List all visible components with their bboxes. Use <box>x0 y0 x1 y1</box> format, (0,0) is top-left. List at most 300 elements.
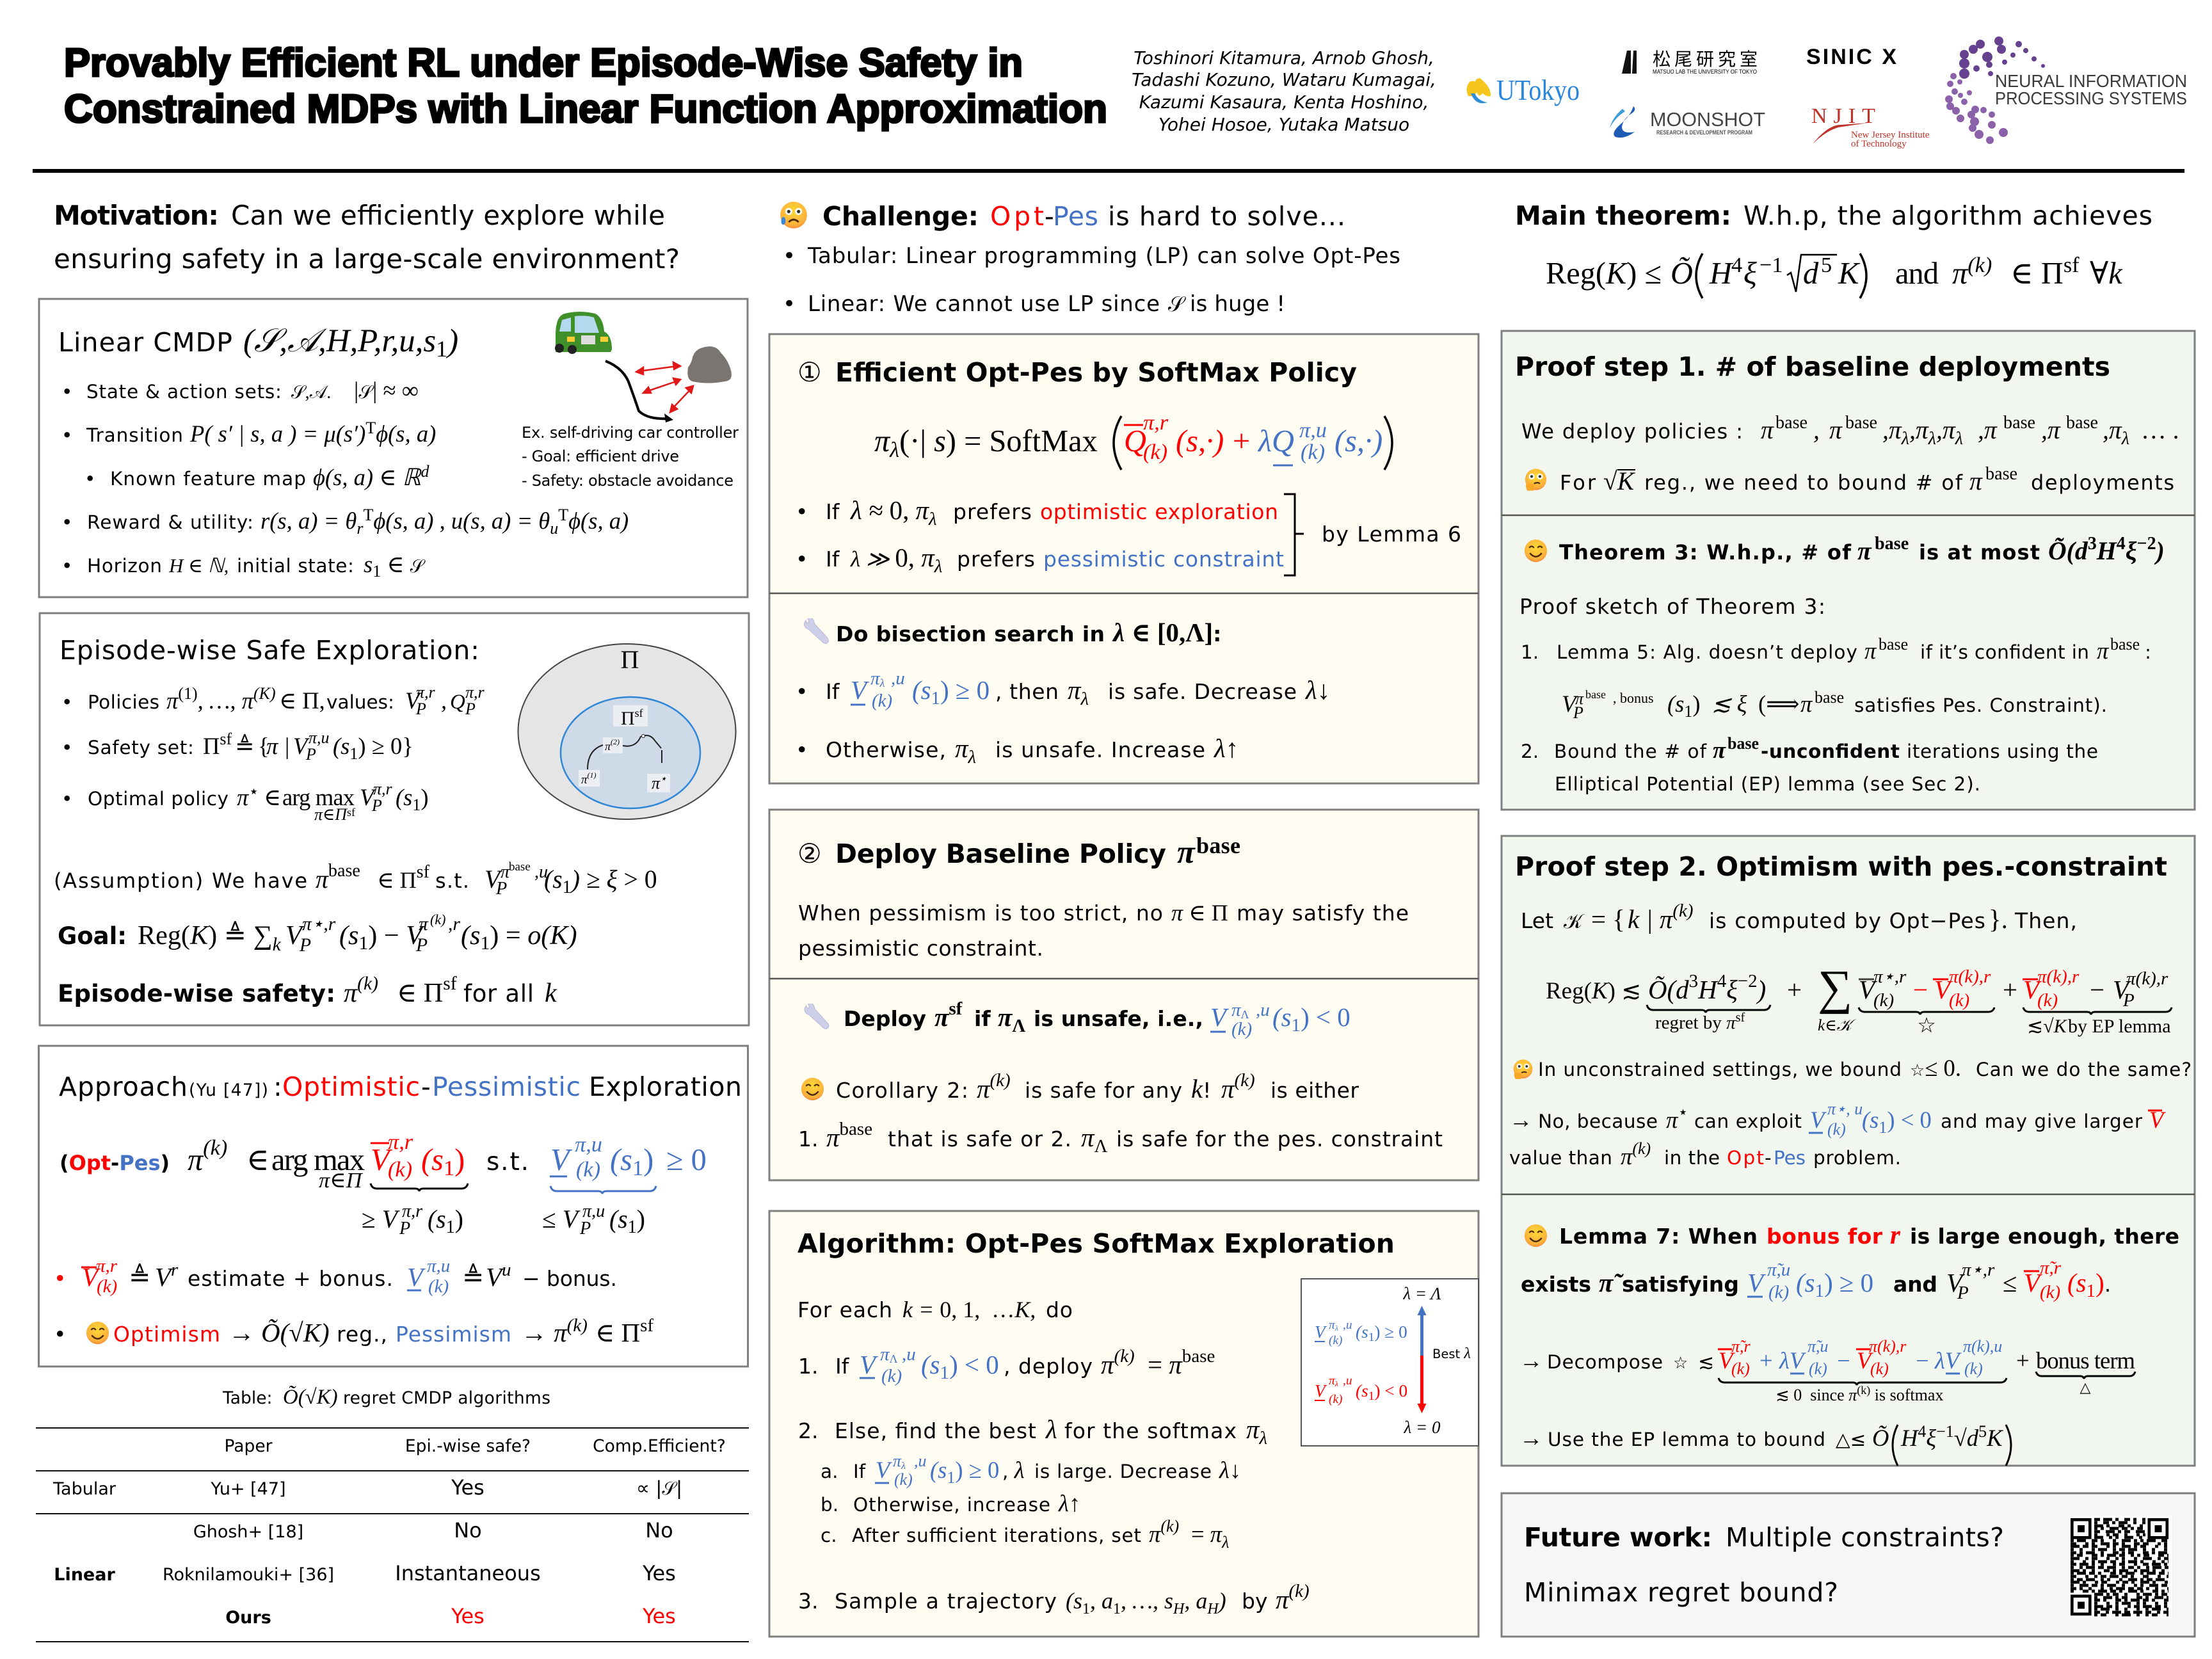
exploitation note: π <box>1621 1143 1633 1169</box>
list: definitions: ∈ Π, <box>279 687 325 714</box>
heading: approach: : <box>273 1071 282 1102</box>
algorithm steps: For each <box>797 1297 892 1322</box>
panel: episode-wise safe exploration <box>40 613 749 1025</box>
bisection bullets: λ↓ <box>1305 676 1330 705</box>
logo: NJIT: New Jersey Institute <box>1851 130 1930 140</box>
goal: Reg( <box>138 920 190 950</box>
theorem 3: is at most <box>1919 540 2040 565</box>
goal: K) ≜ ∑ <box>190 920 273 950</box>
definition of K: = { <box>1591 905 1625 934</box>
algorithm steps: ,u <box>902 1344 916 1365</box>
regret decomposition: π(k),r <box>1949 966 1991 987</box>
definition of K: 𝒦 <box>1564 910 1585 933</box>
thinking note: base <box>1985 464 2017 484</box>
bullet: optimism and pessimism: ∈ Π <box>595 1318 640 1347</box>
decomposition: Decompose <box>1547 1351 1663 1373</box>
proof sketch: base <box>1727 734 1759 753</box>
table: regret CMDP algorithms: Yu+ [47] <box>210 1479 286 1499</box>
bounds under formula: ≤ <box>542 1205 563 1233</box>
logo: Moonshot <box>1610 106 1765 138</box>
regret decomposition: H <box>1697 975 1719 1004</box>
assumption: 1 <box>563 878 572 897</box>
bullet: estimates: V <box>486 1263 504 1292</box>
list: definitions: Safety set: <box>88 737 194 758</box>
bounds under formula: ) <box>637 1205 645 1233</box>
bisection bullets: If <box>826 679 840 704</box>
assumption: sf <box>417 862 430 882</box>
proof sketch: ) <box>1692 691 1701 717</box>
panel: linear CMDP <box>39 299 748 597</box>
exploitation note <box>1509 1100 2166 1169</box>
goal: 1 <box>480 933 490 954</box>
diagram: policy sets: Π <box>621 645 639 674</box>
bullet: optimism and pessimism: • <box>54 1322 66 1347</box>
list: definitions: • <box>61 691 72 713</box>
table: regret CMDP algorithms: Roknilamouki+ [36] <box>163 1565 334 1585</box>
proof sketch: base <box>1815 688 1844 707</box>
list: CMDP definitions: r <box>357 519 364 538</box>
inset: best lambda: V <box>1315 1322 1327 1342</box>
formula: softmax policy: λQ <box>1257 424 1294 458</box>
list: definitions: P <box>371 796 382 815</box>
list: CMDP definitions: P( s′ | s, a ) = μ(s′) <box>189 421 365 447</box>
lemma 7: is large enough, there <box>1910 1224 2179 1249</box>
deployed policies: base <box>1845 413 1877 433</box>
list: CMDP definitions: 𝒮| ≈ ∞ <box>358 377 419 403</box>
algorithm steps: λ <box>1045 1415 1057 1444</box>
logo: Moonshot: RESEARCH & DEVELOPMENT PROGRAM <box>1656 129 1752 136</box>
algorithm steps: 2. <box>798 1418 818 1443</box>
formula: Opt-Pes: (k) <box>576 1157 600 1182</box>
text: pessimism: ∈ Π <box>1189 900 1228 926</box>
proof sketch <box>1519 594 2151 795</box>
regret decomposition: − <box>1913 975 1928 1004</box>
heading: motivation: Motivation: <box>54 200 219 231</box>
deploy condition: Λ <box>1241 1008 1249 1021</box>
corollary: π <box>826 1123 840 1152</box>
algorithm steps: = <box>1148 1350 1169 1379</box>
table: regret CMDP algorithms: No <box>645 1518 673 1543</box>
algorithm steps: ,u <box>914 1452 926 1470</box>
decomposition: π̃,r <box>1731 1337 1751 1356</box>
logo: UTokyo <box>1466 74 1580 106</box>
list: CMDP definitions: initial state: <box>237 555 354 577</box>
list: definitions: (s <box>396 784 412 810</box>
lemma 7: (k) <box>2040 1282 2060 1302</box>
inset: best lambda: ,u <box>1343 1374 1352 1388</box>
proof sketch: if it’s confident in <box>1920 641 2089 663</box>
list: CMDP definitions: • <box>61 381 72 403</box>
future work text <box>1524 1522 2004 1608</box>
deploy condition: V <box>1210 1003 1229 1032</box>
heading: motivation <box>54 200 680 275</box>
list: definitions: π,r <box>465 683 485 701</box>
algorithm steps: is large. Decrease <box>1034 1461 1212 1482</box>
future work text: Future work: <box>1524 1522 1712 1553</box>
list: CMDP definitions: • <box>61 555 72 577</box>
proof sketch: base <box>2110 635 2140 653</box>
bisection bullets: λ <box>1080 689 1089 709</box>
bounds under formula: P <box>579 1219 591 1238</box>
bisection bullets: • <box>796 679 808 704</box>
heading: approach: - <box>421 1071 431 1102</box>
inset: best lambda: λ <box>1463 1345 1471 1362</box>
formula: main theorem: 5 <box>1821 253 1832 277</box>
list: CMDP definitions: | <box>354 377 358 403</box>
deploy condition: if <box>974 1006 991 1031</box>
bisection bullets: π <box>955 734 969 763</box>
exploitation note: π <box>1666 1107 1679 1133</box>
list: definitions <box>61 683 485 824</box>
goal: 1 <box>358 933 368 954</box>
deploy condition: Deploy <box>844 1006 926 1031</box>
formula: Opt-Pes: (s <box>421 1143 444 1177</box>
formula: main theorem: ξ <box>1743 257 1757 291</box>
formula: softmax policy: π,r <box>1143 410 1169 435</box>
goal: P <box>299 935 311 956</box>
bullet: optimism and pessimism <box>54 1315 653 1347</box>
assumption: s.t. <box>435 869 469 893</box>
heading: Efficient Opt-Pes by SoftMax Policy <box>835 357 1357 388</box>
regret decomposition: K <box>2053 1016 2068 1037</box>
list: definitions: 1 <box>349 744 358 763</box>
heading: motivation: Can we efficiently explore while <box>231 200 665 231</box>
thinking note: deployments <box>2031 470 2174 495</box>
table: regret CMDP algorithms: Instantaneous <box>395 1561 541 1585</box>
list: definitions: V <box>293 733 310 759</box>
icon: rock <box>687 346 732 383</box>
lemma 7: (k) <box>1768 1282 1789 1302</box>
formula: main theorem <box>1546 253 2123 298</box>
list: definitions: (s <box>333 733 349 759</box>
logo: NJIT <box>1811 104 1930 149</box>
bisection heading: ∈ [0,Λ]: <box>1131 618 1221 647</box>
trajectory with safety arrows <box>605 361 693 422</box>
list: definitions: sf <box>220 730 232 748</box>
definition of K: Let <box>1521 908 1553 933</box>
list: CMDP definitions: • <box>84 468 95 490</box>
bounds under formula: (s <box>428 1205 446 1233</box>
algorithm steps: Otherwise, increase <box>853 1494 1050 1516</box>
deployed policies: … . <box>2141 416 2179 444</box>
deployed policies: π <box>1761 416 1774 444</box>
EP lemma bound: → <box>1519 1425 1543 1451</box>
bisection bullets <box>796 668 1330 767</box>
algorithm steps: π <box>1169 1350 1183 1379</box>
decomposition: π̃,u <box>1807 1337 1828 1356</box>
lemma 7: exists <box>1521 1272 1591 1297</box>
algorithm steps: 1 <box>947 1468 955 1487</box>
definition of K: is computed by Opt−Pes <box>1709 908 1985 933</box>
algorithm steps: 1 <box>1113 1601 1121 1617</box>
corollary: is safe for any <box>1025 1078 1182 1103</box>
formula: main theorem: Reg( <box>1546 257 1606 291</box>
algorithm steps: a. <box>821 1461 838 1482</box>
proof sketch: π <box>1800 691 1813 717</box>
list: CMDP definitions: T <box>558 506 568 524</box>
formula: Opt-Pes: ≥ 0 <box>666 1143 707 1177</box>
deployed policies: λ <box>1928 429 1936 449</box>
list: definitions: { <box>258 733 269 759</box>
exploitation note: (s <box>1862 1107 1879 1133</box>
corollary: is safe for the pes. constraint <box>1116 1126 1443 1151</box>
exploitation note: V <box>2149 1107 2166 1133</box>
algorithm steps: If <box>853 1461 866 1482</box>
list: CMDP definitions: • <box>61 511 72 533</box>
algorithm steps: , …, s <box>1121 1588 1173 1614</box>
assumption: π <box>316 865 329 894</box>
EP lemma bound: K <box>1986 1425 2003 1451</box>
caption: example: - Safety: obstacle avoidance <box>522 472 733 490</box>
algorithm steps <box>797 1297 1310 1617</box>
assumption: (s <box>544 865 563 894</box>
decomposition: − <box>1916 1347 1929 1374</box>
EP lemma bound: d <box>1967 1425 1979 1451</box>
goal: (s <box>339 920 358 950</box>
challenge bullets: 𝒮 <box>1168 293 1186 316</box>
list: definitions: P <box>465 700 476 718</box>
heading: challenge: Pes <box>1053 201 1098 232</box>
proof sketch: Lemma 5: Alg. doesn’t deploy <box>1557 641 1857 663</box>
episode-wise safety: sf <box>443 974 457 994</box>
heading: approach: Optimistic <box>282 1071 420 1102</box>
decomposition: V <box>1719 1347 1735 1374</box>
regret decomposition: π <box>1726 1013 1736 1033</box>
algorithm steps: λ <box>1221 1533 1229 1551</box>
goal: V <box>406 920 425 950</box>
list: definitions: values: <box>326 691 394 713</box>
algorithm steps: H <box>1206 1601 1219 1617</box>
bisection bullets: (k) <box>872 691 892 711</box>
list: CMDP definitions: u <box>550 519 558 538</box>
EP lemma bound: 4 <box>1918 1422 1926 1441</box>
assumption: base <box>509 860 531 874</box>
assumption: V <box>485 865 503 894</box>
list: definitions: ≜ <box>235 733 255 759</box>
bullet: estimates <box>54 1256 617 1297</box>
heading: linear CMDP: Linear CMDP <box>58 327 232 358</box>
algorithm steps: 3. <box>798 1589 818 1614</box>
logo: NeurIPS: PROCESSING SYSTEMS <box>1995 88 2187 108</box>
algorithm steps: π <box>880 1344 890 1365</box>
regret decomposition: −2 <box>1738 971 1758 991</box>
table: regret CMDP algorithms: Yes <box>451 1475 485 1500</box>
future work text: Multiple constraints? <box>1726 1522 2004 1553</box>
corollary: is either <box>1270 1078 1359 1103</box>
regret decomposition: − <box>2090 975 2104 1004</box>
decomposition: π(k),r <box>1869 1337 1907 1356</box>
bounds under formula: V <box>563 1205 581 1233</box>
proof sketch: π <box>2097 637 2110 664</box>
deploy condition: Λ <box>1012 1016 1025 1036</box>
lemma 7: (s <box>1796 1269 1815 1297</box>
episode-wise safety: ∈ Π <box>397 978 443 1008</box>
logo: Moonshot: MOONSHOT <box>1650 108 1765 131</box>
inset: best lambda <box>1301 1279 1479 1446</box>
assumption: ,u <box>534 862 548 882</box>
algorithm steps: Sample a trajectory <box>835 1589 1057 1614</box>
table: regret CMDP algorithms: Yes <box>642 1604 676 1628</box>
caption: example: Ex. self-driving car controller <box>522 424 739 442</box>
list: CMDP definitions: ϕ(s, a) <box>376 421 436 447</box>
list: CMDP definitions: ∈ <box>381 551 410 577</box>
list: definitions: • <box>61 737 72 758</box>
theorem 3: Theorem 3: W.h.p., # of <box>1559 540 1852 565</box>
exploitation note: and may give larger <box>1941 1110 2143 1132</box>
bisection bullets: is safe. Decrease <box>1108 679 1297 704</box>
EP lemma bound <box>1519 1422 2011 1466</box>
logo: Matsuo lab <box>1622 45 1761 75</box>
exploitation note: (k) <box>1632 1139 1651 1158</box>
inset: best lambda: λ <box>1334 1379 1338 1388</box>
regret decomposition: V <box>1934 975 1953 1004</box>
bullet: estimates: u <box>502 1260 511 1280</box>
episode-wise safety: k <box>545 978 557 1008</box>
unconstrained note: ☆ <box>1910 1061 1925 1080</box>
exploitation note: 1 <box>1879 1118 1887 1137</box>
algorithm steps: (k) <box>1289 1581 1310 1601</box>
algorithm steps: λ <box>1258 1428 1267 1448</box>
algorithm steps: π <box>1276 1585 1290 1614</box>
assumption: ) ≥ ξ <box>570 865 623 894</box>
formula: softmax policy: s) = SoftMax <box>934 424 1098 458</box>
challenge bullets: Tabular: Linear programming (LP) can solve Opt-Pes <box>807 243 1400 269</box>
lemma 7: bonus for <box>1767 1224 1883 1249</box>
EP lemma bound: Õ <box>1872 1425 1889 1451</box>
regret decomposition: by EP lemma <box>2068 1016 2171 1037</box>
regret decomposition: + <box>2003 975 2017 1004</box>
algorithm steps: λ <box>901 1461 906 1471</box>
heading: challenge: - <box>1045 201 1054 232</box>
decomposition: λV <box>1779 1347 1806 1374</box>
heading: Proof step 2. Optimism with pes.-constraint <box>1515 851 2167 882</box>
lambda bullets: prefers <box>957 547 1035 572</box>
formula: main theorem: ∀ <box>2090 257 2108 291</box>
proof sketch: satisfies Pes. Constraint). <box>1854 694 2107 716</box>
formula: main theorem: K <box>1838 257 1861 291</box>
bisection heading: λ <box>1112 618 1131 647</box>
theorem 3: ) <box>2154 537 2165 565</box>
formula: Opt-Pes: π,u <box>575 1132 602 1157</box>
formula: main theorem: π <box>1952 257 1969 291</box>
algorithm steps: (k) <box>1160 1517 1179 1535</box>
table: regret CMDP algorithms: Tabular <box>52 1479 116 1499</box>
algorithm steps: π <box>893 1452 902 1470</box>
algorithm steps: base <box>1182 1346 1215 1366</box>
deployed policies: π <box>1829 416 1843 444</box>
deployed policies: ,π <box>2041 416 2061 444</box>
algorithm steps: π <box>1246 1415 1260 1444</box>
goal: V <box>285 920 305 950</box>
decomposition: ☆ <box>1673 1354 1688 1373</box>
regret decomposition: 3 <box>1689 971 1698 991</box>
table: regret CMDP algorithms: Ghosh+ [18] <box>193 1522 303 1542</box>
regret decomposition: π(k),r <box>2037 966 2080 987</box>
formula: Opt-Pes: ) <box>454 1143 465 1177</box>
algorithm steps: b. <box>821 1494 838 1516</box>
heading: challenge: is hard to solve... <box>1108 201 1345 232</box>
list: definitions: ⋆ <box>248 782 259 801</box>
algorithm steps: (s <box>1066 1588 1082 1614</box>
inset: best lambda: π <box>1329 1374 1336 1388</box>
deploy condition: π <box>1231 1000 1242 1020</box>
list: CMDP definitions: d <box>421 462 429 481</box>
authors: Toshinori Kitamura, Arnob Ghosh, <box>1134 47 1434 68</box>
inset: best lambda: ) ≥ 0 <box>1374 1322 1407 1342</box>
formula: main theorem: H <box>1709 257 1734 291</box>
EP lemma bound: ξ <box>1926 1425 1936 1451</box>
list: definitions: sf <box>347 806 355 819</box>
inset: best lambda: 1 <box>1368 1390 1374 1403</box>
formula: main theorem: d <box>1803 257 1819 291</box>
panel: approach <box>38 1046 748 1366</box>
lemma 7: V <box>2024 1269 2042 1297</box>
lambda bullets: λ <box>928 509 937 529</box>
exploitation note: problem. <box>1813 1147 1901 1169</box>
authors: Kazumi Kasaura, Kenta Hoshino, <box>1139 92 1429 113</box>
logo: NeurIPS: NEURAL INFORMATION <box>1995 71 2187 91</box>
heading: main theorem: Main theorem: <box>1515 200 1731 231</box>
bisection bullets: ) ≥ 0 <box>940 676 990 705</box>
lambda bullets: by Lemma 6 <box>1322 522 1461 547</box>
algorithm steps: (s <box>930 1457 947 1483</box>
lambda bullets: 0, π <box>890 496 929 525</box>
lemma 7: r <box>1890 1221 1901 1249</box>
list: CMDP definitions: ϕ(s, a) ∈ ℝ <box>313 464 422 490</box>
list: definitions: P <box>415 700 426 718</box>
decomposition: → <box>1519 1347 1543 1374</box>
proof sketch: 1. <box>1521 641 1539 663</box>
bounds under formula: ≥ <box>362 1205 382 1233</box>
logo: NJIT: of Technology <box>1851 139 1907 149</box>
regret decomposition: k∈𝒦 <box>1818 1017 1857 1034</box>
corollary: that is safe or 2. <box>888 1126 1071 1151</box>
bullet: estimates: (k) <box>97 1276 117 1297</box>
bullet: estimates: ≜ <box>462 1263 484 1292</box>
proof sketch: 1 <box>1684 702 1692 721</box>
theorem 3: H <box>2096 537 2117 565</box>
regret decomposition: ≲√ <box>2027 1016 2054 1037</box>
challenge bullets <box>783 243 1400 317</box>
diagram: policy sets: ⋆ <box>660 773 667 785</box>
theorem 3: base <box>1875 534 1909 554</box>
deployed policies: base <box>2003 413 2035 433</box>
bullet: estimates: π,u <box>427 1256 450 1276</box>
diagram: policy sets <box>518 644 736 819</box>
list: definitions: V <box>360 784 376 810</box>
decomposition: + <box>2016 1347 2030 1374</box>
bounds under formula: π,u <box>582 1201 605 1221</box>
inset: best lambda: V <box>1315 1381 1327 1400</box>
regret decomposition: + <box>1787 975 1802 1004</box>
corollary: Λ <box>1094 1136 1108 1157</box>
lemma 7: ) <box>2096 1269 2104 1297</box>
formula: Opt-Pes: 1 <box>444 1156 454 1180</box>
goal: ) − <box>368 920 406 950</box>
diagram: policy sets: (2) <box>611 737 620 746</box>
formula: main theorem: K) ≤ <box>1606 257 1662 291</box>
EP lemma bound: −1 <box>1936 1422 1954 1441</box>
decomposition: ≲ <box>1698 1352 1714 1373</box>
text: pessimism: may satisfy the <box>1237 901 1409 926</box>
list: CMDP definitions: r(s, a) = θ <box>260 508 357 534</box>
proof sketch: 2. <box>1521 741 1539 762</box>
table caption: Õ(√K) <box>283 1384 338 1409</box>
list: definitions: arg max <box>282 784 355 810</box>
future work text: Minimax regret bound? <box>1524 1577 1838 1608</box>
formula: Opt-Pes: V <box>371 1143 393 1177</box>
proof sketch: (⟹ <box>1758 691 1800 717</box>
